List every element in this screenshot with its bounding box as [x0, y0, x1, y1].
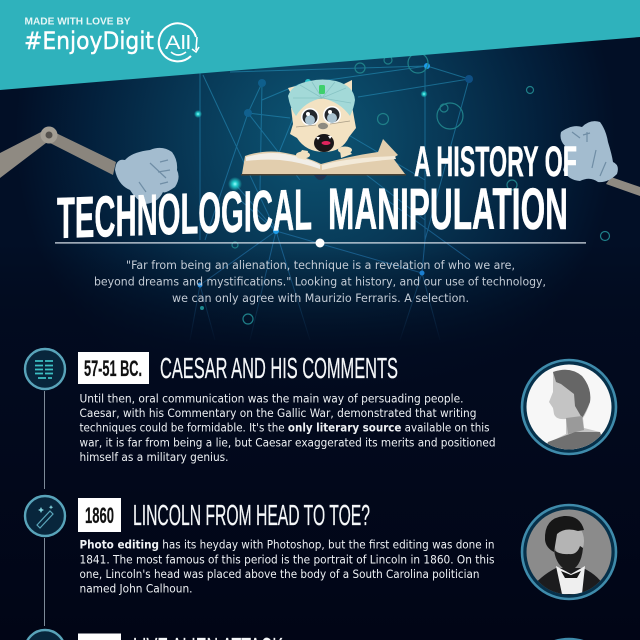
portrait ring [554, 638, 584, 640]
network pattern [190, 66, 470, 340]
logo: made with love by EnjoyDigitAll: MADE WITH LOVE BY [24, 16, 130, 28]
timeline connector 2 [44, 538, 45, 626]
robot arm right [606, 177, 640, 196]
intro quote [94, 258, 546, 305]
intro quote: "Far from being an alienation, technique is a revelation of who we are, [126, 258, 515, 272]
mouth [314, 134, 334, 152]
body text: himself as a military genius. [80, 450, 228, 464]
date badge [78, 352, 149, 384]
portrait: Lincoln [522, 505, 616, 600]
timeline connector 1 [44, 391, 45, 489]
paws [296, 146, 352, 158]
heading: LINCOLN FROM HEAD TO TOE? [133, 500, 370, 532]
teal header band [0, 0, 640, 90]
body text [80, 538, 495, 596]
illustration: cat with turban on a book [241, 80, 406, 180]
network nodes [194, 53, 610, 324]
section: Caesar [25, 349, 616, 464]
date badge [78, 498, 121, 532]
body text: one, Lincoln's head was placed above the body of a South Carolina politician [80, 567, 480, 581]
heading: CAESAR AND HIS COMMENTS [160, 353, 398, 385]
body text: war, it is far from being a lie, but Caesar exaggerated its merits and positioned [80, 435, 496, 449]
date badge [78, 634, 121, 640]
portrait: Caesar [522, 360, 616, 460]
title divider with dot [55, 238, 586, 248]
turban folds [293, 82, 351, 103]
turban [288, 80, 355, 116]
intro quote: we can only agree with Maurizio Ferraris. A selection. [172, 291, 469, 305]
date badge: 57-51 BC. [84, 356, 142, 381]
eyes [301, 106, 341, 126]
icon ring [25, 630, 65, 640]
body text: Caesar, with his Commentary on the Gallic War, demonstrated that writing [80, 406, 476, 420]
emerald [319, 85, 325, 94]
logo: made with love by EnjoyDigitAll: All [165, 33, 191, 54]
cat head and ears [288, 80, 356, 160]
title: TECHNOLOGICAL [57, 177, 312, 251]
icon: magic wand [25, 496, 65, 536]
date badge: 1860 [85, 503, 114, 528]
section: Lincoln [25, 496, 616, 600]
glove left [115, 148, 179, 204]
body text [80, 391, 496, 464]
body text: Photo editing has its heyday with Photoshop, but the first editing was done in [80, 538, 494, 552]
logo: made with love by EnjoyDigitAll [24, 16, 199, 61]
glove right [560, 121, 618, 182]
body text: 1841. The most famous of this period is the portrait of Lincoln in 1860. On this [80, 552, 495, 566]
body text: Until then, oral communication was the main way of persuading people. [80, 391, 464, 405]
section: next entry, cropped at page edge [25, 630, 616, 640]
book [241, 139, 406, 180]
body text: named John Calhoun. [80, 582, 192, 596]
body text: techniques could be formidable. It's the only literary source available on this [80, 421, 490, 435]
intro quote: beyond dreams and mystifications." Looking at history, and our use of technology, [94, 274, 546, 288]
robot arm left [0, 126, 116, 178]
nose and whiskers [296, 121, 350, 129]
icon: text lines [25, 349, 65, 389]
logo: made with love by EnjoyDigitAll: #EnjoyDigit [24, 27, 154, 55]
